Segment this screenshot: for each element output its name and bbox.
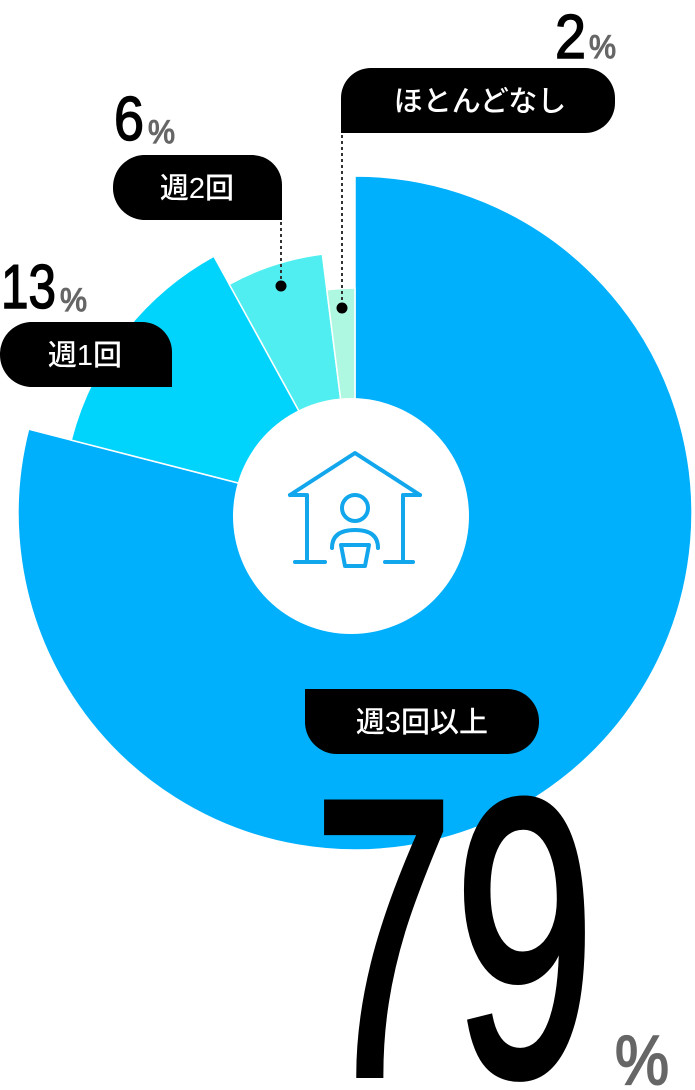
value: 2%: % (589, 29, 616, 65)
value: 2%: 2 (555, 3, 586, 72)
callout: 週2回: 週2回 (160, 173, 234, 205)
callout: 週3回以上: 週3回以上 (356, 707, 488, 739)
callout: 週3回以上 (305, 689, 539, 754)
callout: 週1回 (0, 322, 172, 387)
callout: 週1回: 週1回 (48, 340, 122, 372)
callout: ほとんどなし: ほとんどなし (394, 86, 566, 118)
slice: 週2回 6% (229, 254, 355, 513)
value: 6%: 6 (114, 85, 144, 154)
value: 13%: % (60, 282, 87, 318)
icon: house with person and laptop (290, 453, 420, 566)
callout: ほとんどなし (336, 68, 615, 314)
slice: 週3回以上 79% (18, 176, 692, 850)
slice: ほとんどなし 2% (327, 288, 355, 513)
slice: 週1回 13% (71, 256, 355, 513)
donut chart (18, 176, 692, 850)
value: 13%: 13 (1, 253, 56, 322)
value: 2% (555, 3, 616, 72)
center circle (233, 398, 469, 634)
value: 6% (114, 85, 175, 154)
callout: 週2回 (113, 155, 286, 292)
value: 6%: % (148, 114, 175, 150)
